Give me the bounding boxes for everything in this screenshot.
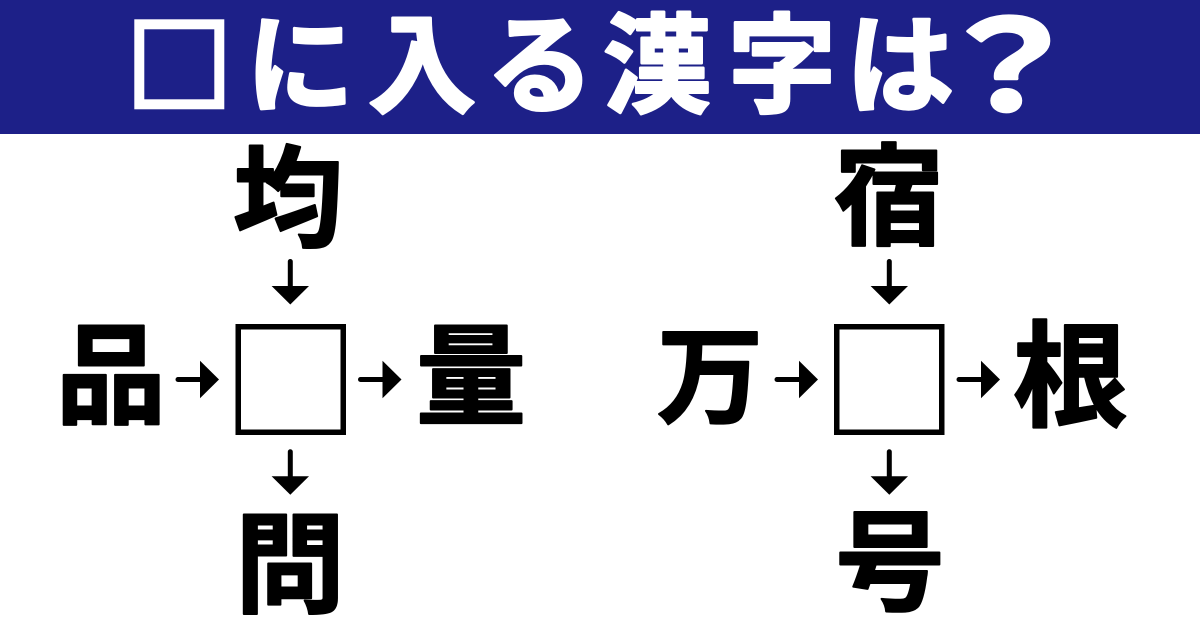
left kanji: 品 xyxy=(56,316,166,439)
arrows xyxy=(777,262,1000,495)
left kanji: 万 xyxy=(657,320,763,438)
title blank square xyxy=(139,24,219,104)
blank box xyxy=(837,327,942,432)
arrows xyxy=(178,262,402,495)
bottom kanji: 号 xyxy=(835,503,945,626)
top kanji: 均 xyxy=(233,139,343,262)
title banner xyxy=(0,0,1200,137)
top kanji: 宿 xyxy=(834,137,944,260)
bottom kanji: 問 xyxy=(235,505,345,628)
title text: に入る漢字は xyxy=(246,6,954,127)
puzzle 2 xyxy=(657,137,1128,626)
title text: ？ xyxy=(930,0,1086,137)
puzzle 1 xyxy=(56,139,526,628)
blank box xyxy=(238,327,343,432)
right kanji: 根 xyxy=(1013,314,1128,442)
right kanji: 量 xyxy=(416,317,526,440)
